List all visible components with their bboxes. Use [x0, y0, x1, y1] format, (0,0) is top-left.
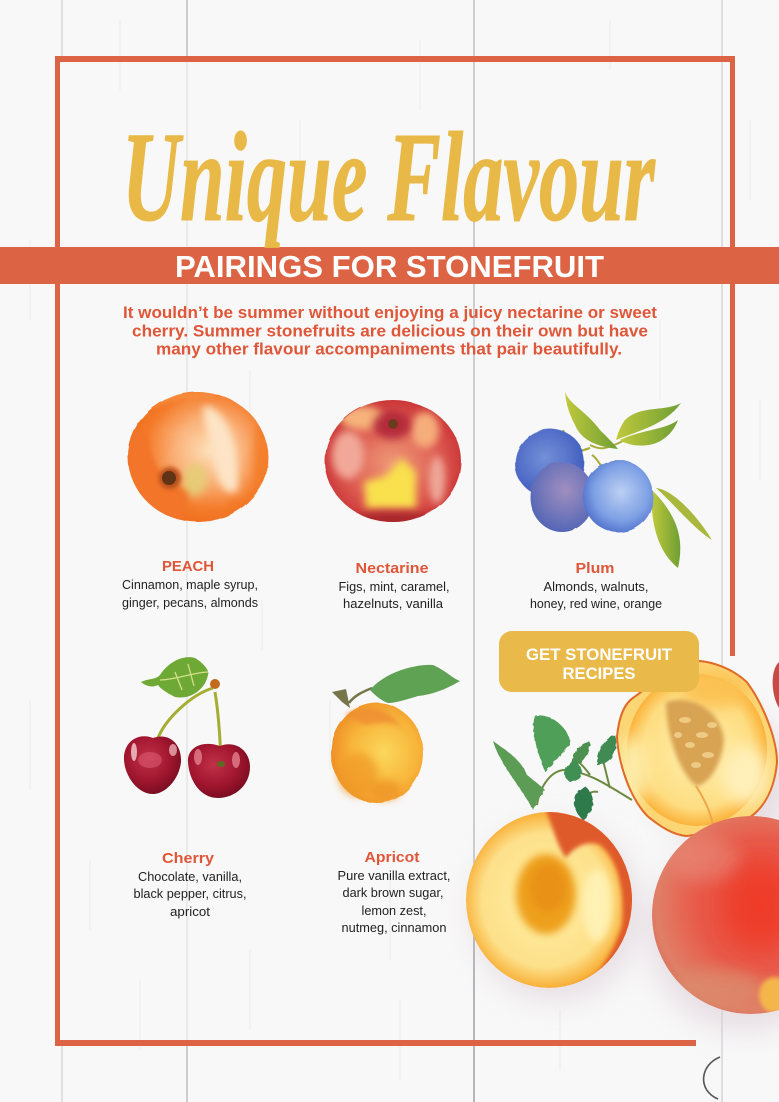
text block: nectarine: Figs, mint, caramel,: [338, 580, 450, 594]
orange frame: [55, 56, 735, 1046]
button: get recipes: [499, 631, 699, 692]
apricot leaf: [349, 665, 460, 703]
button: get recipes: RECIPES: [562, 665, 636, 683]
plum leaves: [565, 392, 712, 568]
icon: plum: [507, 392, 712, 568]
photo: mint sprig: [493, 715, 632, 820]
text block: peach: Cinnamon, maple syrup,: [122, 578, 258, 592]
plum fruits: [507, 421, 593, 505]
icon: peach: [125, 392, 270, 525]
orange band: [0, 247, 779, 284]
text block: plum: honey, red wine, orange: [530, 597, 662, 611]
text block: cherry: black pepper, citrus,: [134, 887, 246, 901]
text block: apricot: lemon zest,: [362, 904, 426, 918]
intro text: many other flavour accompaniments that pair beautifully.: [156, 340, 622, 358]
text block: apricot: [338, 849, 450, 935]
cherry leaf: [141, 657, 208, 698]
photo: lower peach half: [466, 812, 632, 988]
photo: whole peach: [652, 816, 779, 1014]
text block: nectarine: [338, 560, 450, 611]
icon: apricot: [331, 665, 460, 803]
soft shadow: [472, 710, 779, 1031]
photo: upper peach half: [616, 660, 778, 837]
icon: nectarine: [325, 400, 461, 528]
band heading: PAIRINGS FOR STONEFRUIT: [175, 249, 604, 284]
intro text: [123, 303, 657, 358]
text block: apricot: dark brown sugar,: [342, 886, 444, 900]
text block: nectarine: Nectarine: [356, 560, 428, 577]
text block: apricot: Apricot: [364, 849, 420, 866]
icon: cherry: [124, 657, 250, 798]
cherry fruits: [124, 736, 181, 794]
text block: peach: PEACH: [162, 558, 214, 575]
text block: apricot: nutmeg, cinnamon: [342, 921, 447, 935]
text block: cherry: Cherry: [162, 850, 215, 867]
intro text: cherry. Summer stonefruits are delicious on their own but have: [132, 322, 648, 340]
plum stems: [563, 430, 625, 480]
text block: cherry: apricot: [170, 905, 211, 919]
text block: nectarine: hazelnuts, vanilla: [343, 597, 443, 611]
text block: cherry: Chocolate, vanilla,: [138, 870, 242, 884]
cherry stems: [158, 688, 221, 762]
apricot stem: [332, 689, 350, 708]
text block: plum: Plum: [576, 560, 614, 577]
text block: peach: ginger, pecans, almonds: [122, 596, 258, 610]
button: get recipes: GET STONEFRUIT: [526, 646, 672, 664]
photo: small peach edge: [773, 662, 779, 708]
peach photo cluster: [466, 655, 779, 1099]
apricot body: [331, 703, 423, 803]
text block: apricot: Pure vanilla extract,: [338, 869, 450, 883]
text block: plum: Almonds, walnuts,: [544, 580, 648, 594]
text block: plum: [530, 560, 662, 611]
text block: peach: [122, 558, 258, 610]
photo: wood knot: [704, 1057, 720, 1099]
text block: cherry: [134, 850, 246, 919]
intro text: It wouldn’t be summer without enjoying a juicy nectarine or sweet: [123, 303, 657, 322]
